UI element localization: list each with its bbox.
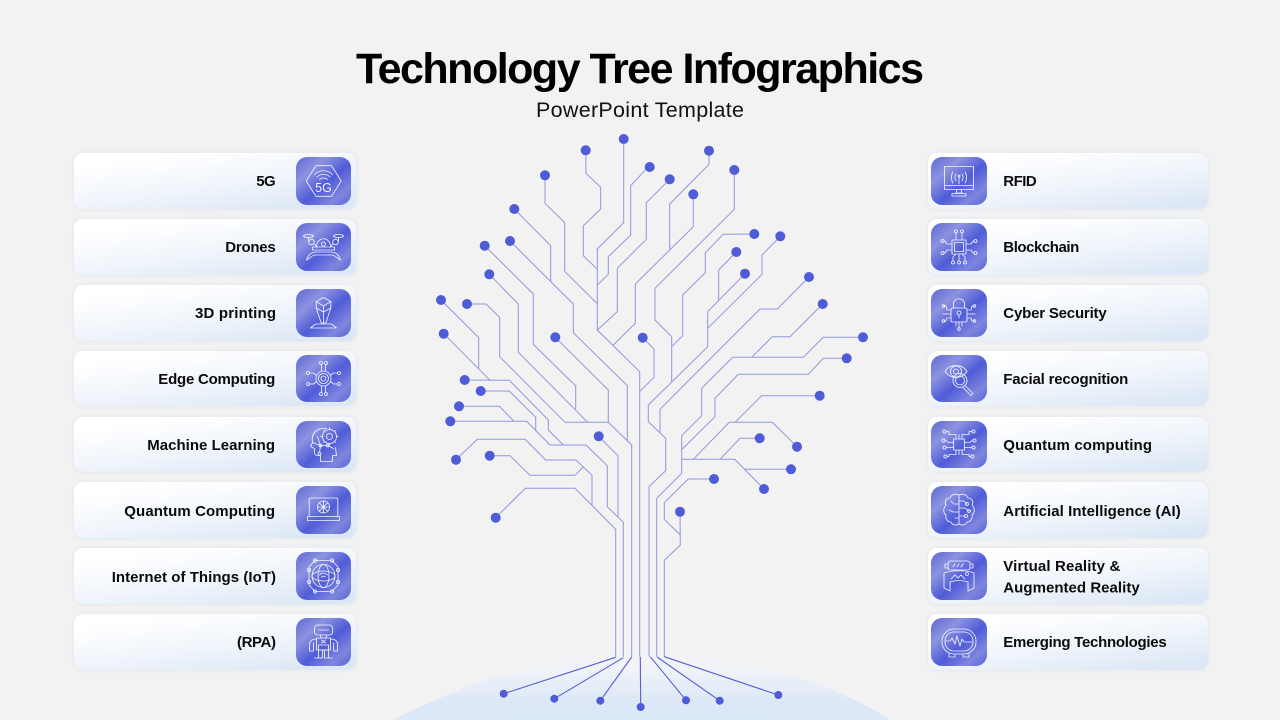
- panel: Edge Computing: Edge Computing: [158, 371, 275, 388]
- panel: Virtual Reality & Augmented Reality: [928, 548, 1208, 604]
- panel: 3D printing: [74, 285, 356, 341]
- icon: RFID monitor: [944, 166, 974, 196]
- icon: quantum circuit: [942, 430, 976, 458]
- panel: Drones: Drones: [225, 239, 276, 256]
- tree roots: [504, 657, 778, 707]
- icon: edge computing: [306, 362, 340, 396]
- panel: Machine Learning: Machine Learning: [147, 437, 275, 454]
- ground mound: [393, 652, 890, 720]
- panel: Edge Computing: [74, 351, 356, 406]
- icon: AI brain: [944, 494, 974, 525]
- technology tree: [436, 134, 868, 711]
- branch end nodes: [436, 134, 868, 711]
- icon: machine learning head: [310, 428, 338, 462]
- panel: Facial recognition: Facial recognition: [1003, 371, 1128, 388]
- panel: 5G: [74, 153, 356, 209]
- panel: Emerging Technologies: [928, 614, 1208, 670]
- title: Technology Tree Infographics: [356, 45, 924, 93]
- subtitle: PowerPoint Template: [536, 98, 744, 122]
- panel: Cyber Security: [928, 285, 1208, 341]
- panel: Blockchain: [928, 219, 1208, 275]
- icon: laptop: [308, 498, 340, 520]
- panel: RPA: [74, 614, 356, 670]
- panel: Quantum computing: Quantum computing: [1003, 437, 1152, 454]
- panel: 5G: 5G: [256, 173, 276, 190]
- panel: RFID: [928, 153, 1208, 209]
- panel: Cyber Security: Cyber Security: [1003, 305, 1107, 322]
- panel: RFID: RFID: [1003, 173, 1037, 190]
- panel: Artificial Intelligence (AI): Artificial Intelligence (AI): [1003, 503, 1181, 520]
- icon: 5G hexagon: 5G: [315, 181, 332, 195]
- icon: drone: [304, 234, 344, 260]
- icon: VR headset: [944, 561, 974, 591]
- panel: Artificial Intelligence (AI): [928, 482, 1208, 538]
- icon: 3D printer: [310, 298, 336, 328]
- panel: Virtual Reality & Augmented Reality: Augmented Reality: [1003, 579, 1140, 596]
- panel: Emerging Technologies: Emerging Technologies: [1003, 634, 1167, 651]
- icon: eye with magnifier: [945, 366, 973, 396]
- tree branches: [441, 139, 863, 657]
- icon: blockchain chip: [941, 230, 977, 264]
- icon: robot: [310, 625, 338, 658]
- icon: 5G hexagon: [306, 166, 341, 196]
- panel: Quantum Computing: [74, 482, 356, 538]
- panel: RPA: (RPA): [237, 634, 276, 651]
- panel: Facial recognition: [928, 351, 1208, 406]
- icon: cyber security lock: [942, 299, 976, 330]
- panel: Internet of Things (IoT): Internet of Things (IoT): [112, 569, 276, 586]
- panel: Machine Learning: [74, 417, 356, 472]
- icon: emerging technologies scope: [942, 629, 976, 657]
- panel: 3D printing: 3D printing: [195, 305, 276, 322]
- panel: Quantum computing: [928, 417, 1208, 472]
- panel: Quantum Computing: Quantum Computing: [124, 503, 275, 520]
- panel: Blockchain: Blockchain: [1003, 239, 1079, 256]
- icon: IoT globe: [307, 559, 340, 593]
- panel: Drones: [74, 219, 356, 275]
- panel: Virtual Reality & Augmented Reality: Virtual Reality &: [1003, 558, 1120, 575]
- panel: Internet of Things (IoT): [74, 548, 356, 604]
